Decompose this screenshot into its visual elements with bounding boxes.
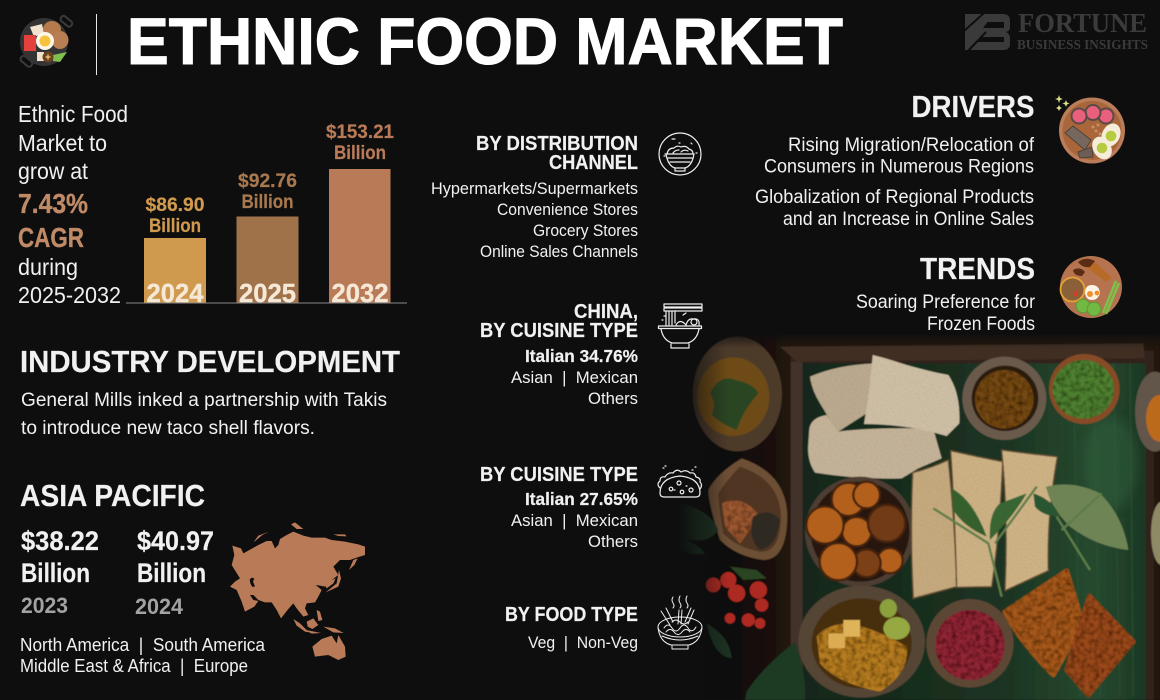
icon: taco — [658, 466, 702, 497]
right edge bowls — [1135, 372, 1160, 565]
left upper bowl — [693, 337, 782, 451]
banana leaf — [803, 363, 1146, 700]
bar 2032: Billion — [334, 142, 386, 164]
bar 2024: 2024 — [146, 278, 204, 308]
logo: Fortune Business Insights: FORTUNE — [1018, 8, 1147, 38]
text: CAGR statement: 7.43% — [18, 188, 88, 219]
text: CAGR statement: grow at — [18, 158, 89, 184]
section: by cuisine type: BY CUISINE TYPE — [480, 464, 638, 486]
stat: 2024 value: 2024 — [135, 594, 184, 619]
icon: trends platter — [1060, 256, 1122, 318]
map: Asia Pacific — [230, 522, 365, 660]
dark leaves — [680, 503, 805, 700]
text: other regions — [20, 635, 266, 676]
section: by distribution channel — [431, 133, 638, 261]
stat: 2023 value: Billion — [21, 558, 90, 588]
bar 2025: 2025 — [239, 278, 296, 308]
icon: drivers platter — [1055, 95, 1125, 164]
text: CAGR statement: 2025-2032 — [18, 282, 121, 308]
section: by food type: Veg | Non-Veg — [528, 633, 638, 652]
left fade — [678, 330, 728, 700]
section: china by cuisine type: Italian 34.76% — [525, 346, 638, 366]
bar 2024: Billion — [149, 215, 201, 237]
logo: Fortune Business Insights — [964, 8, 1148, 52]
text: industry development detail: General Mills inked a partnership with Takis — [21, 390, 387, 411]
section: by distribution channel: Convenience Stores — [497, 201, 638, 219]
icon: bowl in circle — [659, 133, 701, 175]
icon: frying pan — [19, 15, 73, 68]
section: by cuisine type: Others — [588, 532, 638, 551]
section: china by cuisine type: Asian | Mexican — [511, 368, 638, 387]
section: china by cuisine type — [480, 301, 638, 408]
section: drivers: Rising Migration/Relocation of — [788, 135, 1035, 156]
herb sprig — [933, 487, 1102, 597]
bar 2024: $86.90 — [146, 194, 205, 216]
stat: 2023 value: 2023 — [21, 593, 68, 618]
green chutney bowl — [1049, 354, 1120, 424]
bar 2032: $153.21 — [326, 121, 394, 143]
wooden table — [680, 335, 1160, 700]
red flowers — [706, 567, 768, 629]
section: drivers: DRIVERS — [912, 89, 1034, 124]
text: other regions: North America | South America — [20, 635, 266, 655]
section: china by cuisine type: BY CUISINE TYPE — [480, 320, 638, 342]
text: CAGR statement — [18, 101, 128, 308]
stat: 2024 value — [135, 526, 214, 619]
text: industry development detail: to introduce new taco shell flavors. — [21, 418, 315, 439]
section: drivers — [755, 89, 1035, 230]
section: trends: Soaring Preference for — [856, 292, 1036, 313]
lime wedges — [880, 599, 910, 640]
axis line — [126, 302, 407, 304]
bar 2024 — [144, 194, 206, 308]
section: by distribution channel: BY DISTRIBUTION — [476, 133, 638, 155]
text: CAGR statement: CAGR — [18, 222, 84, 253]
section: china by cuisine type: Others — [588, 389, 638, 408]
bar 2025: Billion — [242, 191, 294, 213]
tray frame — [780, 343, 1154, 700]
section: drivers: Globalization of Regional Products — [755, 187, 1034, 208]
photo: ethnic food spread on banana leaf — [678, 330, 1160, 700]
text: industry development detail — [21, 390, 387, 439]
heading: industry development: INDUSTRY DEVELOPMENT — [20, 344, 400, 379]
section: by distribution channel: Online Sales Channels — [480, 243, 638, 261]
stat: 2023 value: $38.22 — [21, 526, 99, 556]
section: trends: TRENDS — [920, 251, 1035, 286]
section: by distribution channel: CHANNEL — [549, 152, 638, 174]
rolled wraps — [911, 450, 1057, 598]
red spice bowl — [926, 599, 1014, 688]
left heart-shaped bowl — [708, 458, 787, 560]
text: CAGR statement: Market to — [18, 130, 107, 156]
section: drivers: Consumers in Numerous Regions — [764, 156, 1034, 178]
bar 2025: $92.76 — [238, 170, 297, 192]
section: by cuisine type: Asian | Mexican — [511, 511, 638, 530]
heading: asia pacific: ASIA PACIFIC — [20, 478, 205, 513]
text: CAGR statement: during — [18, 254, 78, 280]
bar chart: market size — [126, 121, 407, 308]
top fade — [678, 330, 1160, 348]
flatbreads — [808, 355, 959, 479]
curry bowl — [798, 586, 925, 698]
section: by food type — [505, 604, 638, 652]
bar 2032 — [326, 121, 394, 308]
fried samosas — [1005, 571, 1133, 695]
title: ETHNIC FOOD MARKET — [127, 4, 843, 78]
stat: 2024 value: Billion — [137, 558, 206, 588]
green mango — [1046, 484, 1128, 550]
section: by food type: BY FOOD TYPE — [505, 604, 638, 626]
text: CAGR statement: Ethnic Food — [18, 101, 128, 127]
section: by distribution channel: Hypermarkets/Supermarkets — [431, 180, 638, 198]
section: china by cuisine type: CHINA, — [574, 301, 638, 323]
icon: ramen bowl — [658, 596, 702, 649]
bar 2025 — [236, 170, 298, 308]
bar 2032: 2032 — [332, 278, 388, 308]
section: drivers: and an Increase in Online Sales — [783, 209, 1034, 230]
icon: noodle bowl — [658, 304, 702, 348]
section: trends: Frozen Foods — [927, 314, 1035, 335]
stat: 2024 value: $40.97 — [137, 526, 214, 556]
section: by cuisine type — [480, 464, 638, 551]
section: trends — [856, 251, 1036, 335]
text: other regions: Middle East & Africa | Europe — [20, 656, 248, 676]
title divider — [96, 14, 97, 75]
stat: 2023 value — [21, 526, 99, 618]
logo: Fortune Business Insights: BUSINESS INSIGHTS — [1017, 37, 1148, 52]
section: by distribution channel: Grocery Stores — [533, 222, 638, 240]
section: by cuisine type: Italian 27.65% — [525, 489, 638, 509]
sweet potato plate — [805, 477, 915, 587]
pickle bowl — [962, 357, 1046, 440]
